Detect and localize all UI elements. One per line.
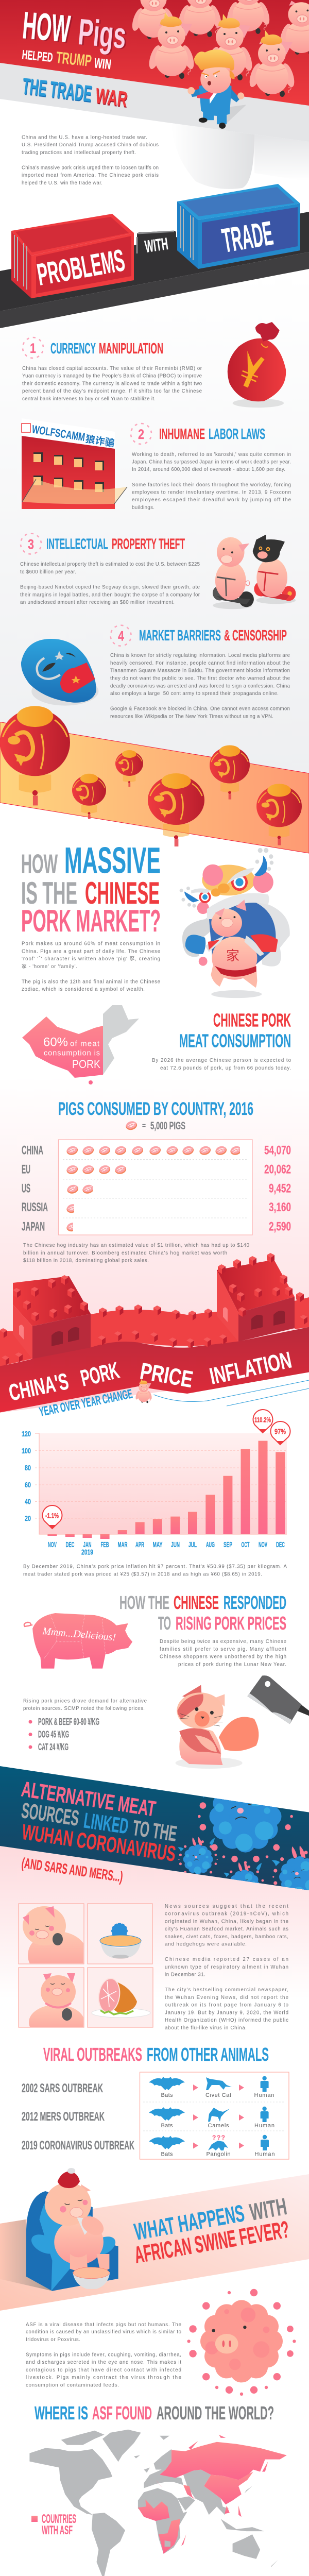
values: 54,070 bbox=[264, 1144, 291, 1157]
row: mers: Human bbox=[254, 2123, 274, 2129]
heading: MASSIVE bbox=[64, 840, 161, 881]
badge 4: 4 bbox=[118, 629, 124, 644]
with tag bbox=[137, 231, 176, 257]
factory windows bbox=[33, 452, 104, 492]
heading: IS THE bbox=[21, 876, 77, 910]
country labels bbox=[22, 1144, 48, 1233]
text bbox=[22, 941, 160, 992]
text: Pork makes up around 60% of meat consumption in bbox=[22, 941, 160, 947]
text 4 bbox=[110, 653, 290, 719]
great wall banner bbox=[0, 1253, 309, 1419]
text: wuhan outbreak: the Wuhan Evening News, did not report the bbox=[165, 1995, 288, 2001]
background: pork section bbox=[0, 1077, 309, 1413]
text: Despite being twice as expensive, many Chinese bbox=[160, 1639, 286, 1645]
text: The pig is also the 12th and final animal in the Chinese bbox=[22, 979, 160, 985]
banner title bbox=[7, 1346, 294, 1406]
section gray background bbox=[0, 270, 309, 774]
badge 1 bbox=[23, 337, 43, 358]
text 2: employees escaped their dreadful work by jumping off the bbox=[132, 497, 291, 503]
heading: WUHAN CORONAVIRUS bbox=[21, 1820, 177, 1866]
icon: cat and cleaver bbox=[176, 1675, 309, 1769]
text: wuhan outbreak: city's Huanan Seafood market. Animals such as bbox=[165, 1926, 288, 1932]
heading: HOW THE bbox=[119, 1592, 169, 1613]
heading 3: PROPERTY THEFT bbox=[112, 536, 185, 552]
callout 110.2%: 110.2% bbox=[254, 1416, 271, 1424]
values bbox=[264, 1144, 291, 1233]
wall structure bbox=[0, 1260, 309, 1413]
row: coronavirus: Human bbox=[254, 2151, 275, 2158]
text 2: Working to death, referred to as 'karoshi,' was quite common in bbox=[132, 452, 291, 457]
text 1: Yuan currency is managed by the People's Bank of China (PBOC) to improve bbox=[22, 373, 202, 379]
title: HELPED bbox=[21, 47, 54, 65]
wave lines bbox=[153, 1380, 309, 1406]
callout 110.2% bbox=[253, 1410, 273, 1433]
heading 4: MARKET BARRIERS bbox=[139, 628, 221, 644]
heading bbox=[21, 840, 161, 938]
text: prices of pork during the Lunar New Year. bbox=[178, 1662, 286, 1667]
text 4: heavily censored. For instance, people cannot find information about the bbox=[110, 660, 290, 666]
icon: pigs on segways bbox=[213, 535, 296, 609]
row: sars: Bats bbox=[161, 2092, 173, 2098]
text: Iridovirus or Poxvirus. bbox=[26, 2337, 80, 2343]
x axis labels bbox=[48, 1540, 285, 1556]
text 2: Some factories lock their doors throughout the workday, forcing bbox=[132, 482, 291, 488]
text: ASF is a viral disease that infects pigs but not humans. The bbox=[26, 2322, 181, 2328]
heading: TO bbox=[158, 1613, 171, 1634]
text 3 bbox=[20, 562, 200, 605]
chinese glyph on lion pig: 家 bbox=[226, 948, 239, 963]
heading bbox=[179, 1010, 291, 1051]
text: Chinese shoppers were unbothered by the high bbox=[160, 1654, 286, 1660]
text 2 bbox=[132, 452, 291, 511]
text: and discharges secreted in the eye and nose. This makes it bbox=[26, 2360, 181, 2365]
text 2: employees to render involuntary overtime. In 2013, 9 Foxconn bbox=[132, 489, 291, 496]
text 2: Japan. China has surpassed Japan in terms of work deaths per year. bbox=[132, 460, 291, 465]
intro text: trading practices and intellectual property theft. bbox=[22, 150, 136, 156]
pig silhouette bbox=[24, 1613, 132, 1669]
outbreak labels: 2019 CORONAVIRUS OUTBREAK bbox=[22, 2139, 134, 2153]
text 2: In 2014, around 600,000 died of overwork - about 1,600 per day. bbox=[132, 467, 285, 472]
intro text: U.S. President Donald Trump accused China of dubious bbox=[22, 142, 159, 148]
legend: = bbox=[142, 1122, 146, 1130]
text 1: their domestic economy. The currency is allowed to trade within a tight two bbox=[22, 381, 202, 386]
text bbox=[160, 1639, 286, 1667]
x axis labels: DEC bbox=[276, 1540, 285, 1549]
banner title: CHINA'S bbox=[7, 1368, 71, 1406]
price list: DOG 45 ¥/KG bbox=[38, 1729, 69, 1739]
text: contagious to pigs that have direct contact with infected bbox=[26, 2367, 181, 2373]
country labels: JAPAN bbox=[22, 1219, 45, 1233]
intro text bbox=[22, 135, 159, 186]
text 1: percent band of the day's midpoint range. If it shifts too far the Chinese bbox=[22, 388, 202, 394]
heading: PORK MARKET? bbox=[21, 904, 161, 938]
text 1: central bank intervenes to buy or sell Yuan to stabilize it. bbox=[22, 396, 156, 402]
plot area bbox=[39, 1433, 287, 1534]
panel: sleeping pig bbox=[18, 1903, 84, 1964]
world map bbox=[29, 2430, 287, 2576]
country labels: EU bbox=[22, 1163, 30, 1177]
text: livestock. Pigs mainly contract the virus through the bbox=[26, 2375, 181, 2381]
x axis labels: JAN bbox=[83, 1540, 92, 1549]
text: wuhan outbreak: News sources suggest that the recent bbox=[165, 1904, 288, 1909]
african swine fever section bbox=[0, 2168, 309, 2396]
text 1: China has closed capital accounts. The value of their Renminbi (RMB) or bbox=[22, 366, 202, 371]
row: sars: Human bbox=[254, 2092, 274, 2098]
transmission table bbox=[140, 2072, 289, 2159]
y axis labels: 40 bbox=[25, 1497, 31, 1506]
text: wuhan outbreak: coronavirus outbreak (2019-nCoV), which bbox=[165, 1911, 288, 1917]
grid lines bbox=[35, 1451, 287, 1518]
small pig bbox=[135, 1379, 152, 1403]
cursive label: Mmm...Delicious! bbox=[42, 1625, 116, 1643]
text 3: Beijing-based Ninebot copied the Segway design, slowed their growth, ate bbox=[20, 584, 200, 590]
heading bbox=[119, 1592, 286, 1634]
outbreak labels bbox=[22, 2081, 134, 2153]
map legend bbox=[31, 2512, 76, 2537]
heading: WHERE IS bbox=[35, 2402, 88, 2424]
x axis labels: NOV bbox=[48, 1540, 57, 1549]
text: wuhan outbreak: outbreak on its front page from January 6 to bbox=[165, 2002, 288, 2008]
road front face bbox=[0, 252, 309, 328]
battlements bbox=[0, 1253, 307, 1365]
china map bbox=[22, 1005, 139, 1084]
road bbox=[0, 212, 309, 311]
text 4: resources like Wikipedia or The New York Times without using a VPN. bbox=[110, 714, 273, 719]
map label: consumption is bbox=[44, 1049, 100, 1057]
red header bbox=[0, 0, 309, 106]
x axis labels: SEP bbox=[224, 1540, 232, 1549]
text: zodiac, which is considered a symbol of wealth. bbox=[22, 987, 145, 992]
text: alternative protein bbox=[23, 1698, 147, 1711]
bars bbox=[47, 1441, 285, 1539]
row: coronavirus bbox=[149, 2134, 275, 2158]
viral outbreaks bbox=[22, 2044, 289, 2159]
row: sars: Civet Cat bbox=[205, 2092, 231, 2098]
problem 2: inhumane labor laws bbox=[22, 418, 291, 511]
row: mers: Camels bbox=[208, 2123, 229, 2129]
badge 4 bbox=[111, 625, 131, 646]
text 4: they do not want the public to see. The first doctor who warned about the bbox=[110, 676, 290, 681]
text: families still prefer to serve pig. Many affluent bbox=[160, 1647, 286, 1652]
text 3: an undisclosed amount after receiving an $80 million investment. bbox=[20, 600, 175, 605]
x axis labels: JUL bbox=[188, 1540, 197, 1549]
country labels: CHINA bbox=[22, 1144, 43, 1157]
x axis labels: AUG bbox=[206, 1540, 215, 1549]
y axis labels: 80 bbox=[25, 1464, 31, 1472]
caption: meat trader stated pork was priced at ¥25 ($3.57) in 2018 and as high as ¥60 ($8.65) in 2019. bbox=[23, 1571, 262, 1578]
pigs consumed by country bbox=[22, 1099, 291, 1264]
callout 97% bbox=[271, 1421, 290, 1445]
map label: 60% bbox=[43, 1036, 68, 1049]
title bbox=[21, 4, 129, 111]
badge 3 bbox=[21, 534, 41, 554]
pink band bbox=[0, 2174, 309, 2311]
x axis labels: MAY bbox=[152, 1540, 163, 1549]
legend bbox=[125, 1120, 185, 1132]
y axis labels: 120 bbox=[22, 1430, 31, 1438]
factory illustration bbox=[22, 418, 127, 509]
container: trade bbox=[177, 184, 300, 269]
heading bbox=[35, 2402, 274, 2424]
values: 3,160 bbox=[269, 1200, 291, 1214]
price list bbox=[29, 1717, 99, 1752]
text: Symptoms in pigs include fever, coughing, vomiting, diarrhea, bbox=[26, 2352, 181, 2358]
text: alternative protein: protein sources. SCMP noted the following prices. bbox=[23, 1706, 145, 1711]
caption bbox=[23, 1564, 287, 1578]
badge 2 bbox=[131, 423, 151, 444]
text: wuhan outbreak: originated in Wuhan, China, likely began in the bbox=[165, 1919, 288, 1925]
heading 3: INTELLECTUAL bbox=[46, 536, 108, 552]
heading: VIRAL OUTBREAKS bbox=[43, 2044, 142, 2065]
text: 家 - 'home' or 'family'. bbox=[22, 963, 77, 970]
caption: By December 2019, China's pork price inflation hit 97 percent. That's ¥50.99 ($7.35) per kilogram. A bbox=[23, 1564, 287, 1569]
x axis labels: JUN bbox=[171, 1540, 180, 1549]
bar chart: pork inflation bbox=[22, 1410, 290, 1578]
caption bbox=[23, 1243, 250, 1264]
badge 2: 2 bbox=[138, 427, 144, 442]
map label bbox=[43, 1036, 100, 1071]
factory sign: WOLFSCAMM bbox=[31, 422, 86, 444]
text: By 2026 the average Chinese person is expected to bbox=[152, 1058, 291, 1063]
text 4: Google & Facebook are blocked in China. One cannot even access common bbox=[110, 706, 290, 712]
caption: $118 billion in 2018, dominating global pork sales. bbox=[23, 1258, 149, 1264]
axes bbox=[35, 1433, 287, 1534]
y axis labels bbox=[22, 1430, 31, 1523]
row dividers bbox=[63, 1159, 247, 1218]
badge 3: 3 bbox=[28, 537, 34, 552]
x axis labels: NOV bbox=[259, 1540, 267, 1549]
x axis labels: 2019 bbox=[81, 1548, 93, 1556]
chinese pork consumption bbox=[22, 1005, 291, 1084]
safety net bbox=[22, 479, 127, 504]
text: 'roof' 宀 character is written above 'pig' 豕, creating bbox=[22, 956, 160, 962]
text 3: their margins in legal battles, and then bought the corpse of a company for bbox=[20, 592, 200, 598]
caption: billion in annual turnover. Bloomberg estimated China's hog market was worth bbox=[23, 1250, 227, 1256]
icon: opera mask bbox=[21, 639, 98, 706]
heading: CHINESE bbox=[85, 876, 160, 910]
title: THE TRADE bbox=[21, 73, 93, 107]
icon: lion dance pig bbox=[180, 848, 290, 998]
x axis labels: FEB bbox=[101, 1540, 109, 1549]
intro text: China's massive pork crisis urged them to loosen tariffs on bbox=[22, 165, 159, 171]
container: problems bbox=[11, 214, 134, 298]
panels: pig to table bbox=[19, 1904, 153, 2040]
country labels: US bbox=[22, 1182, 30, 1196]
text: wuhan outbreak: in December 31. bbox=[165, 1972, 205, 1977]
map label: of meat bbox=[70, 1040, 100, 1048]
heading 2: LABOR LAWS bbox=[209, 426, 265, 443]
gray platform bbox=[0, 63, 309, 189]
how the chinese responded bbox=[23, 1592, 309, 1769]
text 3: Chinese intellectual property theft is estimated to cost the U.S. between $225 bbox=[20, 562, 200, 567]
factory sign: 狼诈骗 bbox=[84, 433, 115, 449]
text: wuhan outbreak: Health Organization (WHO) informed the public bbox=[165, 2018, 288, 2023]
callout -1.1%: -1.1% bbox=[45, 1512, 59, 1520]
text 1 bbox=[22, 366, 202, 402]
x axis labels: DEC bbox=[66, 1540, 75, 1549]
price list: PORK & BEEF 60-90 ¥/KG bbox=[38, 1717, 99, 1727]
row: mers bbox=[149, 2107, 274, 2129]
banner title: PORK bbox=[78, 1357, 122, 1392]
y axis labels: 100 bbox=[22, 1447, 31, 1455]
panel: pig bbox=[18, 1967, 84, 2028]
x axis labels: MAR bbox=[117, 1540, 128, 1549]
row: coronavirus: ? ? ? bbox=[212, 2134, 225, 2141]
title: Pigs bbox=[77, 12, 128, 57]
title: TRUMP bbox=[55, 48, 93, 70]
text: wuhan outbreak: Chinese media reported 27 cases of an bbox=[165, 1957, 288, 1962]
text: wuhan outbreak: and hedgehogs were available. bbox=[165, 1942, 247, 1947]
text: consumption of contaminated feeds. bbox=[26, 2382, 119, 2388]
heading: SOURCES bbox=[20, 1798, 80, 1831]
x axis labels: APR bbox=[135, 1540, 144, 1549]
heading 1: CURRENCY bbox=[50, 341, 96, 357]
y axis labels: 60 bbox=[25, 1481, 31, 1489]
panel: ham bbox=[88, 1968, 153, 2027]
legend: 5,000 PIGS bbox=[150, 1120, 185, 1132]
problem 1: currency manipulation bbox=[22, 322, 286, 408]
with tag: WITH bbox=[144, 234, 169, 256]
text: wuhan outbreak bbox=[165, 1904, 288, 2031]
viruses bbox=[178, 1796, 309, 1890]
lanterns bbox=[0, 706, 302, 846]
x axis labels: OCT bbox=[241, 1540, 249, 1549]
text 3: to $600 billion per year. bbox=[20, 569, 76, 575]
subheading: (AND SARS AND MERS...) bbox=[21, 1855, 124, 1885]
price list: CAT 24 ¥/KG bbox=[38, 1742, 68, 1752]
text: wuhan outbreak: January 19. But by January 9, 2020, the World bbox=[165, 2010, 288, 2015]
title: HOW bbox=[21, 4, 72, 50]
icon: money bag bbox=[228, 322, 286, 408]
heading: LINKED bbox=[82, 1808, 130, 1838]
heading 2: INHUMANE bbox=[159, 426, 205, 443]
map label: PORK bbox=[72, 1058, 100, 1071]
callout 97%: 97% bbox=[274, 1427, 286, 1436]
text 4: also employs a large 50 cent army to spread their propaganda online. bbox=[110, 691, 279, 697]
values: 20,062 bbox=[264, 1163, 291, 1177]
heading: TO THE bbox=[131, 1816, 179, 1846]
problem 3: intellectual property theft bbox=[20, 534, 296, 609]
heading: ALTERNATIVE MEAT bbox=[20, 1776, 158, 1821]
lantern band bbox=[0, 706, 309, 853]
text: wuhan outbreak: snakes, civet cats, foxes, badgers, bamboo rats, bbox=[165, 1934, 288, 1940]
text: wuhan outbreak: unknown type of respiratory ailment in Wuhan bbox=[165, 1964, 288, 1970]
title: WAR bbox=[94, 83, 129, 111]
intro text: China and the U.S. have a long-heated trade war. bbox=[22, 135, 147, 140]
asf world map bbox=[29, 2402, 287, 2576]
outbreak labels: 2012 MERS OUTBREAK bbox=[22, 2110, 105, 2124]
text: wuhan outbreak: about the flu-like virus in China. bbox=[165, 2025, 247, 2031]
trump character bbox=[187, 49, 246, 129]
subtitle: YEAR OVER YEAR CHANGE bbox=[38, 1386, 134, 1419]
pictogram rows bbox=[66, 1145, 243, 1233]
problem 4: market barriers bbox=[21, 625, 290, 719]
icon: sick pig in armchair bbox=[0, 2168, 118, 2291]
map legend: WITH ASF bbox=[42, 2523, 73, 2537]
text: wuhan outbreak: The city's bestselling commercial newspaper, bbox=[165, 1987, 288, 1993]
values: 2,590 bbox=[269, 1219, 291, 1233]
heading bbox=[20, 1776, 179, 1866]
caption: The Chinese hog industry has an estimated value of $1 trillion, which has had up to $140 bbox=[23, 1243, 250, 1248]
banner title: PRICE bbox=[138, 1358, 195, 1393]
section: how massive bbox=[21, 840, 290, 998]
row: sars bbox=[149, 2076, 274, 2098]
heading: CHINESE bbox=[174, 1592, 219, 1613]
row: coronavirus: Bats bbox=[161, 2151, 173, 2158]
label: PROBLEMS bbox=[35, 243, 127, 292]
outbreak labels: 2002 SARS OUTBREAK bbox=[22, 2081, 103, 2095]
row: coronavirus: Pangolin bbox=[206, 2151, 231, 2158]
heading: ASF FOUND bbox=[92, 2402, 152, 2424]
text 4: deadly coronavirus was arrested and was forced to sign a confession. China bbox=[110, 683, 290, 689]
text: China. Pigs are a great part of daily life. The Chinese bbox=[22, 949, 160, 954]
y axis labels: 20 bbox=[25, 1514, 31, 1523]
badge 1: 1 bbox=[30, 341, 36, 356]
text 2: buildings. bbox=[132, 505, 154, 511]
asf world map: COUNTRIES bbox=[42, 2512, 76, 2526]
text: eat 72.6 pounds of pork, up from 66 pounds today. bbox=[160, 1065, 291, 1071]
text bbox=[152, 1058, 291, 1071]
text bbox=[26, 2322, 181, 2388]
title: WIN bbox=[93, 55, 112, 72]
heading 1: MANIPULATION bbox=[99, 341, 163, 357]
text 4: China is known for strictly regulating information. Local media platforms are bbox=[110, 653, 290, 658]
panel: virus soup bbox=[88, 1904, 152, 1964]
hero section bbox=[0, 0, 309, 189]
icon: pink virus pig bbox=[187, 2289, 296, 2396]
row: mers: Bats bbox=[161, 2123, 173, 2129]
intro text: helped the U.S. win the trade war. bbox=[22, 180, 102, 186]
table frame bbox=[59, 1140, 252, 1235]
crowd of pigs bbox=[130, 0, 309, 97]
heading: HOW bbox=[21, 849, 58, 879]
text: alternative protein: Rising pork prices drove demand for alternative bbox=[23, 1698, 147, 1704]
values: 9,452 bbox=[269, 1182, 291, 1196]
country labels: RUSSIA bbox=[22, 1200, 48, 1214]
text 4: Tiananmen Square Massacre in Baidu. The government blocks information bbox=[110, 668, 290, 674]
text: condition is caused by an unclassified virus which is similar to bbox=[26, 2329, 181, 2335]
navy banner: alternative meat bbox=[0, 1766, 309, 1890]
callout -1.1% bbox=[42, 1505, 62, 1529]
background: lower pink bbox=[0, 1846, 309, 1999]
intro text: imported meat from America. The Chinese pork crisis bbox=[22, 173, 159, 178]
